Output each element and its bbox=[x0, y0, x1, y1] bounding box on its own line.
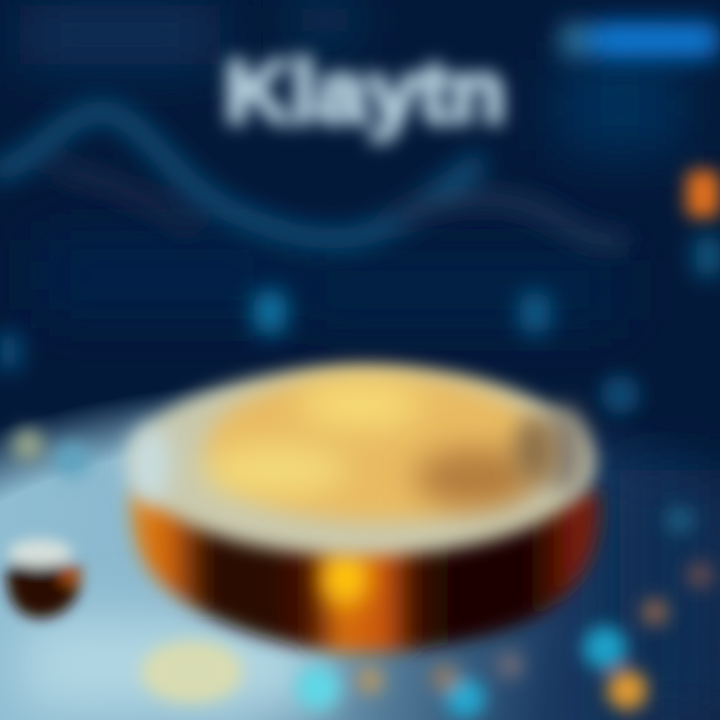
face highlight top bbox=[298, 381, 422, 429]
coin face bbox=[207, 373, 543, 521]
coin rim bbox=[130, 368, 594, 556]
badge: blue bar bbox=[560, 22, 720, 58]
rim shade right bbox=[543, 406, 587, 494]
rim light left bbox=[130, 425, 170, 505]
coin bbox=[130, 368, 599, 653]
platform dots bbox=[12, 375, 714, 718]
face highlight left bbox=[203, 444, 347, 496]
right side dark ring bbox=[620, 470, 720, 720]
accent: orange marker bbox=[686, 170, 720, 218]
coin side band bbox=[132, 490, 599, 653]
coin band highlight bbox=[321, 550, 369, 606]
platform disc bbox=[0, 370, 720, 720]
small coin bbox=[7, 539, 81, 618]
chart line bbox=[0, 112, 620, 241]
face shade far right bbox=[513, 416, 557, 484]
title: Klaytn: Klaytn bbox=[224, 42, 506, 141]
platform light patch bbox=[20, 620, 320, 710]
background glow bbox=[20, 0, 680, 320]
face shade right bbox=[415, 448, 535, 508]
glowing ring bbox=[146, 646, 238, 698]
network nodes bbox=[0, 236, 720, 369]
